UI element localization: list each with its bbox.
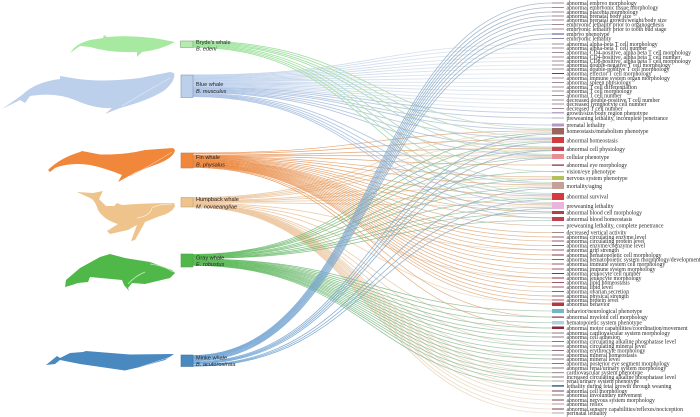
rows: T cell phenotypes: decreased T cell number: [566, 106, 623, 112]
rows: homeostasis and mortality phenotypes: abnormal cell physiology: [566, 147, 625, 153]
rows: circulating, immune and lipid phenotypes: abnormal behavior: [566, 302, 610, 308]
rows: motor, cardiovascular and mineral phenotypes: abnormal cell morphology: [566, 389, 628, 395]
links: minke whale: [193, 3, 552, 366]
links: gray whale: [193, 133, 552, 386]
node: fin whale: [181, 153, 225, 168]
rows: motor, cardiovascular and mineral phenotypes: abnormal involuntary movement: [566, 393, 642, 399]
icon: blue whale: [2, 72, 174, 114]
rows: embryo phenotypes: abnormal placenta morphology: [566, 10, 638, 16]
links: blue whale to T cell rows: [193, 44, 552, 108]
node: blue whale: Blue whale: [196, 82, 223, 88]
rows: T cell phenotypes: abnormal alpha-beta T cell morphology: [566, 42, 658, 48]
rows: homeostasis and mortality phenotypes: abnormal homeostasis: [566, 138, 619, 144]
rows: homeostasis and mortality phenotypes: abnormal blood cell morphology: [566, 210, 642, 216]
whale silhouettes: [2, 35, 175, 370]
rows: T cell phenotypes: abnormal double-negative T cell morphology: [566, 63, 671, 69]
rows: motor, cardiovascular and mineral phenotypes: abnormal mineral homeostasis: [566, 353, 638, 359]
node: humpback whale: Humpback whale: [196, 197, 239, 203]
rows: embryo phenotypes: embryonic lethality: [566, 36, 611, 42]
rows: circulating, immune and lipid phenotypes: abnormal lipid level: [566, 285, 613, 291]
rows: homeostasis and mortality phenotypes: preweaning lethality, complete penetrance: [566, 224, 664, 230]
rows: circulating, immune and lipid phenotypes: [552, 230, 700, 326]
rows: embryo phenotypes: embryonic lethality prior to organogenesis: [566, 22, 665, 28]
phenotype rows: [552, 1, 700, 417]
rows: motor, cardiovascular and mineral phenotypes: abnormal mineral level: [566, 357, 620, 363]
rows: motor, cardiovascular and mineral phenotypes: abnormal erythrocyte morphology: [566, 348, 646, 354]
rows: motor, cardiovascular and mineral phenotypes: abnormal cardiovascular system morphology: [566, 331, 670, 337]
rows: circulating, immune and lipid phenotypes: abnormal circulating protein level: [566, 239, 645, 245]
rows: circulating, immune and lipid phenotypes: hematopoietic system phenotype: [566, 320, 642, 326]
rows: motor, cardiovascular and mineral phenotypes: lethality during fetal growth through weaning: [566, 383, 672, 390]
icon: Bryde's whale: [70, 35, 175, 57]
rows: motor, cardiovascular and mineral phenotypes: abnormal posterior eye segment morphology: [566, 362, 670, 368]
node: blue whale: [181, 75, 227, 98]
rows: homeostasis and mortality phenotypes: vision/eye phenotype: [566, 169, 616, 175]
node: gray whale: E. robustus: [196, 262, 224, 268]
node: humpback whale: M. novaeangliae: [196, 204, 237, 210]
rows: circulating, immune and lipid phenotypes: abnormal circulating enzyme level: [566, 235, 647, 241]
rows: T cell phenotypes: abnormal CD4-positive, alpha beta T cell number: [566, 55, 681, 61]
links: bryde's whale: [193, 41, 552, 202]
rows: circulating, immune and lipid phenotypes: decreased vertical activity: [566, 230, 627, 236]
rows: T cell phenotypes: abnormal alpha-beta T cell number: [566, 46, 647, 52]
rows: T cell phenotypes: decreased double-positive T cell number: [566, 98, 660, 104]
node: Bryde's whale: B. edeni: [196, 46, 217, 52]
rows: T cell phenotypes: abnormal T cell morphology: [566, 89, 632, 95]
rows: circulating, immune and lipid phenotypes: abnormal enzyme/coenzyme level: [566, 244, 645, 250]
rows: T cell phenotypes: abnormal CD8-positive, alpha beta T cell morphology: [566, 59, 691, 65]
rows: T cell phenotypes: abnormal T cell number: [566, 93, 622, 99]
rows: homeostasis and mortality phenotypes: mortality/aging: [566, 184, 602, 190]
rows: circulating, immune and lipid phenotypes: abnormal lipid homeostasis: [566, 280, 631, 286]
rows: circulating, immune and lipid phenotypes: abnormal ovarian secretion: [566, 290, 629, 296]
node: gray whale: [181, 254, 224, 268]
node: minke whale: B. acutorostrata: [196, 362, 236, 368]
rows: circulating, immune and lipid phenotypes: abnormal hematopoietic cell morphology: [566, 253, 662, 259]
node: fin whale: Fin whale: [196, 155, 220, 161]
whale source nodes: [180, 40, 239, 368]
rows: motor, cardiovascular and mineral phenotypes: abnormal nervous system morphology: [566, 398, 655, 404]
rows: T cell phenotypes: growth/size/body region phenotype: [566, 111, 648, 117]
rows: T cell phenotypes: abnormal double-positive T cell morphology: [566, 67, 670, 73]
rows: circulating, immune and lipid phenotypes: abnormal myeloid cell morphology: [566, 315, 648, 321]
rows: homeostasis and mortality phenotypes: abnormal eye morphology: [566, 163, 627, 169]
rows: T cell phenotypes: abnormal immune system organ morphology: [566, 76, 670, 82]
sankey links: [193, 3, 552, 413]
rows: homeostasis and mortality phenotypes: homeostasis/metabolism phenotype: [566, 129, 649, 135]
rows: circulating, immune and lipid phenotypes: abnormal hematopoietic system morphology/development: [566, 258, 700, 264]
rows: circulating, immune and lipid phenotypes: abnormal grip strength: [566, 248, 619, 254]
rows: motor, cardiovascular and mineral phenotypes: [552, 326, 688, 417]
rows: T cell phenotypes: abnormal CD4-positive, alpha beta T cell morphology: [566, 50, 691, 56]
icon: gray whale: [65, 254, 175, 291]
rows: embryo phenotypes: [552, 1, 667, 42]
rows: T cell phenotypes: abnormal spleen physiology: [566, 80, 631, 86]
rows: motor, cardiovascular and mineral phenotypes: abnormal reflex: [566, 401, 603, 408]
icon: humpback whale: [77, 191, 175, 241]
rows: circulating, immune and lipid phenotypes: abnormal leukocyte cell number: [566, 272, 641, 278]
rows: motor, cardiovascular and mineral phenotypes: abnormal sensory capabilities/reflexes/nociception: [566, 406, 683, 413]
links: blue whale to lower rows: [193, 88, 552, 218]
icon: minke whale: [46, 351, 174, 370]
rows: T cell phenotypes: abnormal effector T cell morphology: [566, 70, 652, 77]
rows: motor, cardiovascular and mineral phenotypes: abnormal motor capabilities/coordination/movement: [566, 326, 688, 332]
rows: T cell phenotypes: abnormal T cell differentiation: [566, 84, 637, 91]
rows: homeostasis and mortality phenotypes: abnormal survival: [566, 194, 609, 200]
rows: homeostasis and mortality phenotypes: cellular phenotype: [566, 155, 610, 161]
rows: motor, cardiovascular and mineral phenotypes: abnormal cell adhesion: [566, 335, 620, 341]
rows: motor, cardiovascular and mineral phenotypes: abnormal circulating alkaline phosphatase level: [566, 340, 676, 346]
rows: circulating, immune and lipid phenotypes: behavior/neurological phenotype: [566, 309, 643, 315]
rows: homeostasis and mortality phenotypes: preweaning lethality: [566, 204, 614, 210]
rows: circulating, immune and lipid phenotypes: abnormal physical strength: [566, 294, 629, 300]
rows: embryo phenotypes: abnormal prenatal growth/weight/body size: [566, 18, 667, 24]
rows: T cell phenotypes: prenatal lethality: [566, 123, 605, 129]
rows: embryo phenotypes: abnormal prenatal body size: [566, 14, 632, 20]
rows: homeostasis and mortality phenotypes: nervous system phenotype: [566, 176, 628, 182]
rows: motor, cardiovascular and mineral phenotypes: renal/urinary system phenotype: [566, 379, 639, 385]
node: blue whale: B. musculus: [196, 89, 227, 95]
rows: embryo phenotypes: embryo phenotype: [566, 32, 610, 38]
node: fin whale: B. physalus: [196, 162, 225, 168]
node: Bryde's whale: Bryde's whale: [196, 40, 231, 46]
rows: T cell phenotypes: decreased lymphocyte cell number: [566, 102, 647, 108]
rows: motor, cardiovascular and mineral phenotypes: perinatal lethality: [566, 411, 607, 417]
node: minke whale: [181, 355, 236, 368]
rows: T cell phenotypes: [552, 42, 691, 129]
node: humpback whale: [181, 197, 239, 210]
rows: T cell phenotypes: preweaning lethality, incomplete penetrance: [566, 116, 668, 122]
rows: embryo phenotypes: abnormal embryo morphology: [566, 1, 637, 7]
rows: motor, cardiovascular and mineral phenotypes: abnormal circulating mineral level: [566, 344, 646, 350]
rows: circulating, immune and lipid phenotypes: abnormal immune system morphology: [566, 267, 656, 273]
links: fin whale: [193, 131, 552, 328]
rows: homeostasis and mortality phenotypes: [552, 128, 664, 230]
node: Bryde's whale: [180, 40, 231, 52]
rows: circulating, immune and lipid phenotypes: abnormal immune system cell morphology: [566, 262, 665, 268]
rows: motor, cardiovascular and mineral phenotypes: cardiovascular system phenotype: [566, 370, 643, 376]
rows: motor, cardiovascular and mineral phenotypes: increased circulating alkaline phosphatase level: [566, 375, 676, 381]
links: humpback whale: [193, 132, 552, 413]
rows: embryo phenotypes: embryonic lethality prior to tooth bud stage: [566, 27, 667, 33]
icon: fin whale: [33, 148, 175, 182]
rows: circulating, immune and lipid phenotypes: abnormal leukocyte morphology: [566, 276, 642, 282]
rows: embryo phenotypes: abnormal embryonic tissue morphology: [566, 5, 658, 11]
rows: motor, cardiovascular and mineral phenotypes: abnormal renal/urinary system morphology: [566, 366, 666, 372]
rows: homeostasis and mortality phenotypes: abnormal blood homeostasis: [566, 217, 633, 223]
node: minke whale: Minke whale: [196, 356, 227, 362]
node: gray whale: Gray whale: [196, 256, 224, 262]
rows: circulating, immune and lipid phenotypes: abnormal protein level: [566, 298, 619, 304]
